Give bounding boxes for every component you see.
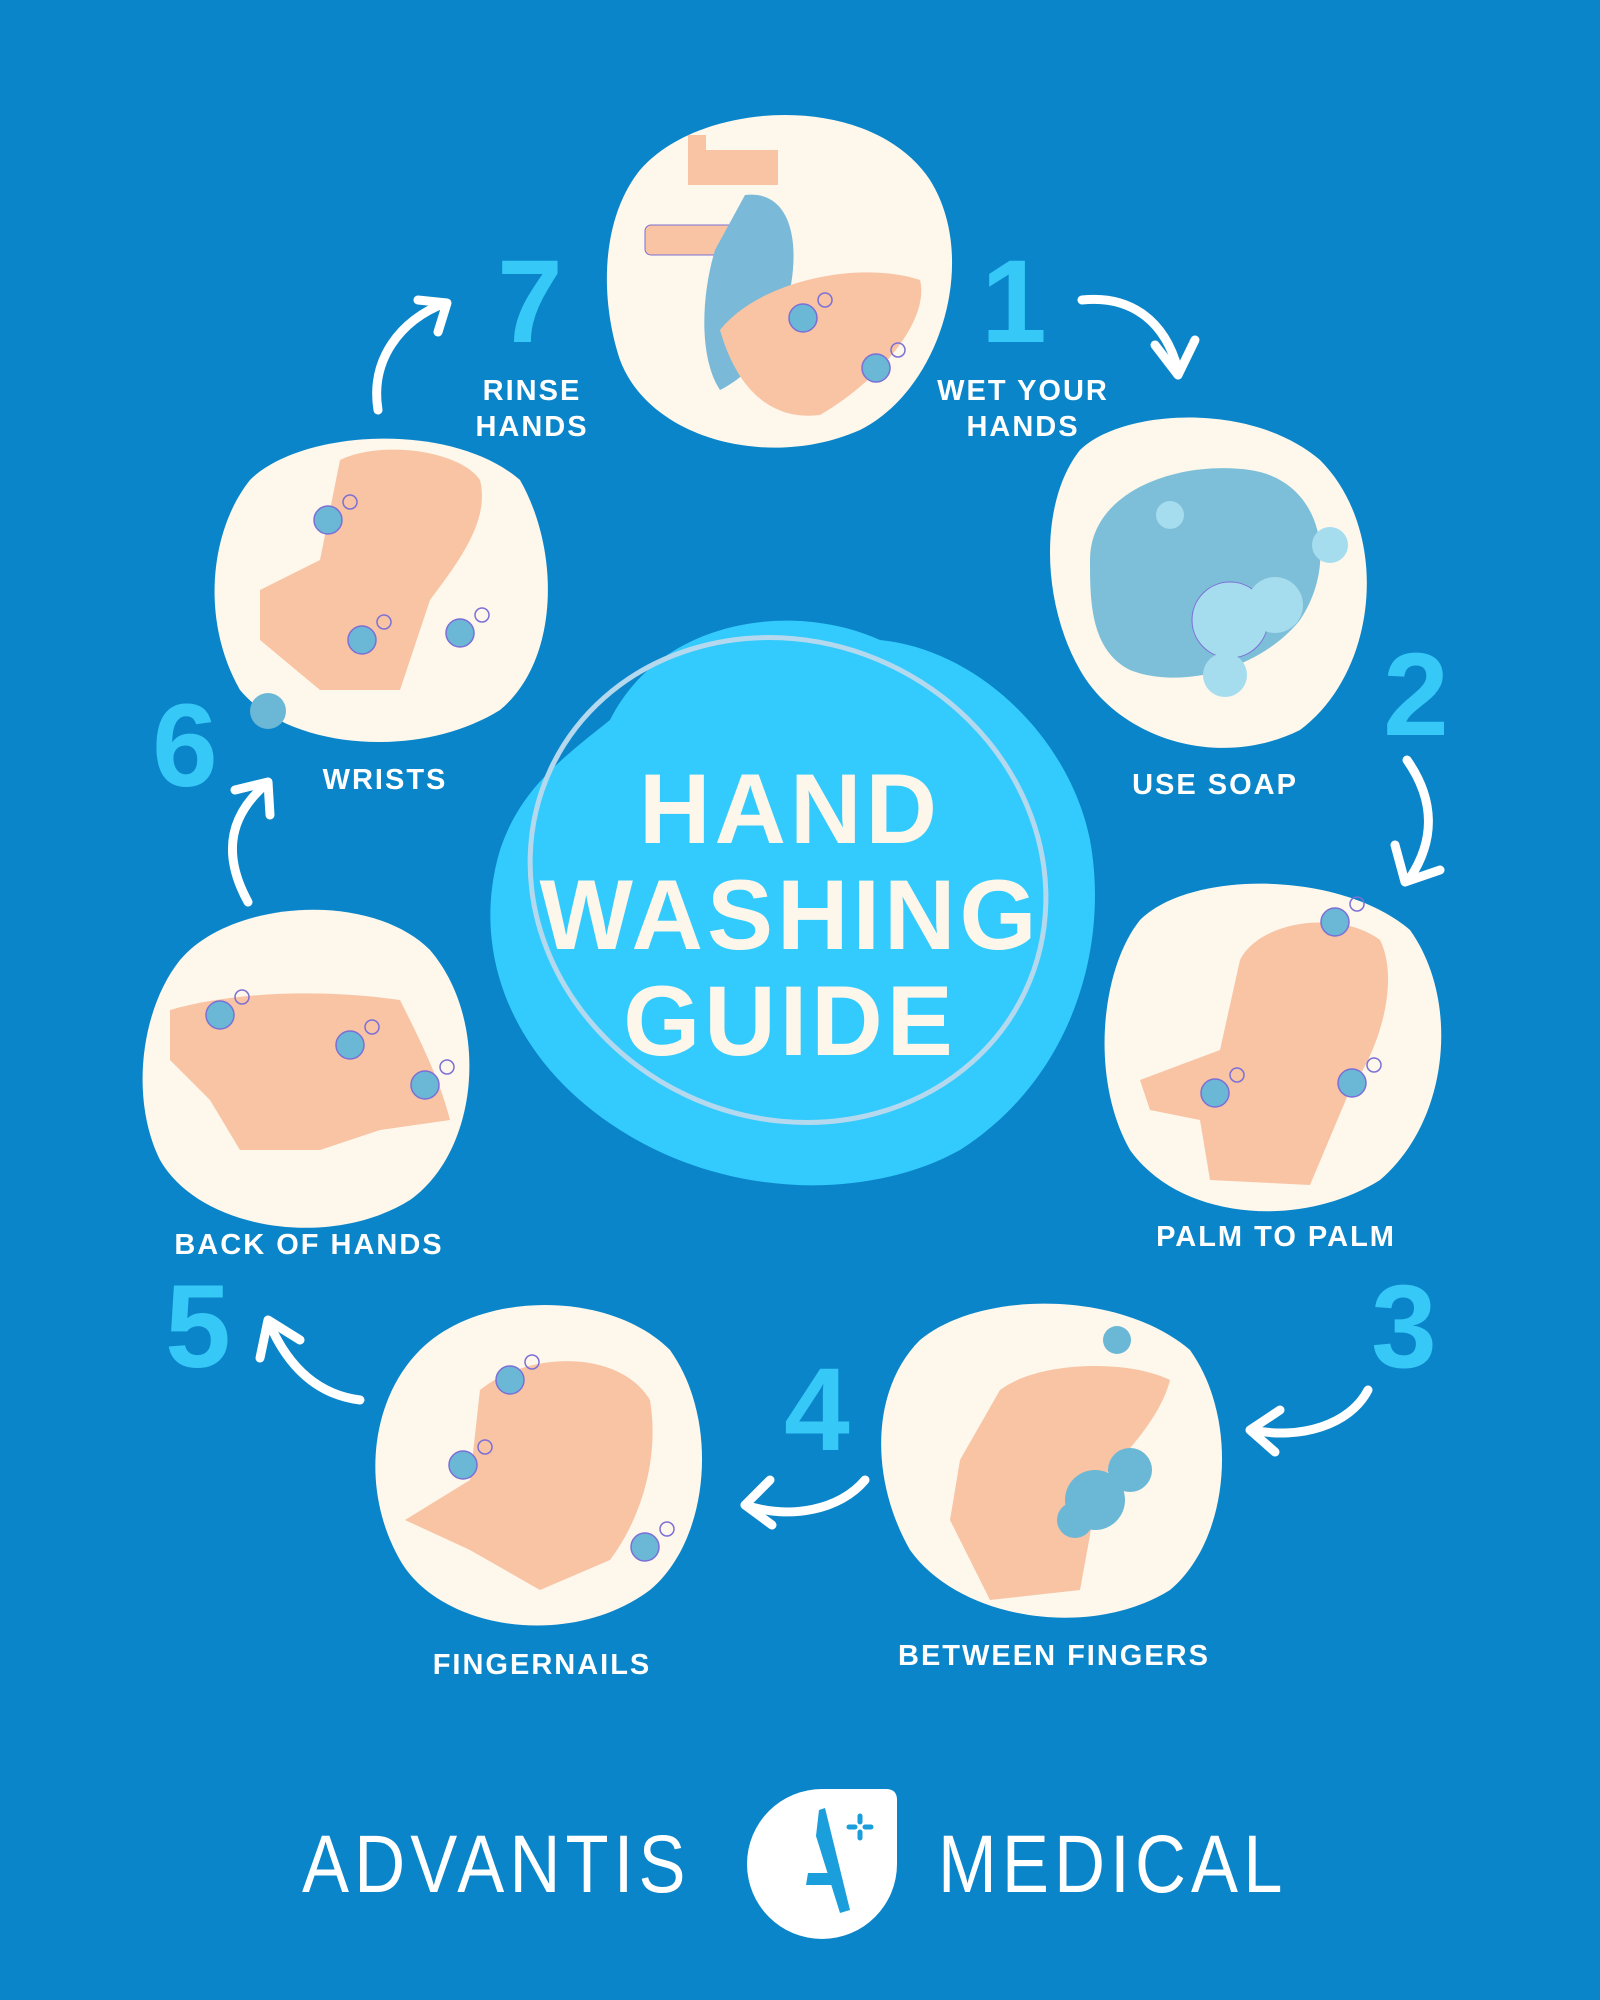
- text: USE SOAP: [1132, 769, 1298, 801]
- labels: [937, 375, 1109, 443]
- text: BETWEEN FINGERS: [898, 1640, 1210, 1672]
- text: 2: [1383, 629, 1449, 761]
- logo: [747, 1789, 897, 1939]
- arrows: [232, 299, 1440, 1525]
- title: HAND: [639, 753, 941, 864]
- title: WASHING: [539, 859, 1040, 970]
- step 6 circle: back of hands: [143, 910, 469, 1228]
- text: FINGERNAILS: [433, 1649, 651, 1681]
- labels: HANDS: [966, 411, 1080, 443]
- numbers: 1: [981, 236, 1047, 368]
- text: 6: [152, 680, 218, 812]
- text: 3: [1371, 1261, 1437, 1393]
- title: [539, 753, 1040, 1076]
- text: 5: [165, 1261, 231, 1393]
- title: GUIDE: [623, 965, 957, 1076]
- text: 4: [784, 1344, 850, 1476]
- step 7 circle: wrists: [215, 439, 548, 742]
- text: BACK OF HANDS: [174, 1229, 444, 1261]
- step 2 circle: soap: [1050, 418, 1367, 748]
- text: WRISTS: [323, 764, 447, 796]
- text: 7: [497, 236, 563, 368]
- text: PALM TO PALM: [1156, 1221, 1396, 1253]
- text: RINSE: [483, 375, 581, 407]
- center blob: [450, 554, 1126, 1206]
- footer brand: MEDICAL: [938, 1819, 1288, 1910]
- labels: WET YOUR: [937, 375, 1109, 407]
- step 5 circle: fingernails: [375, 1305, 702, 1626]
- step 4 circle: between fingers: [881, 1304, 1222, 1618]
- footer brand: [302, 1789, 1288, 1939]
- text: HANDS: [475, 411, 589, 443]
- footer brand: ADVANTIS: [302, 1819, 691, 1910]
- step 3 circle: palm to palm: [1105, 884, 1441, 1211]
- step 1 circle: wet hands: [607, 115, 952, 448]
